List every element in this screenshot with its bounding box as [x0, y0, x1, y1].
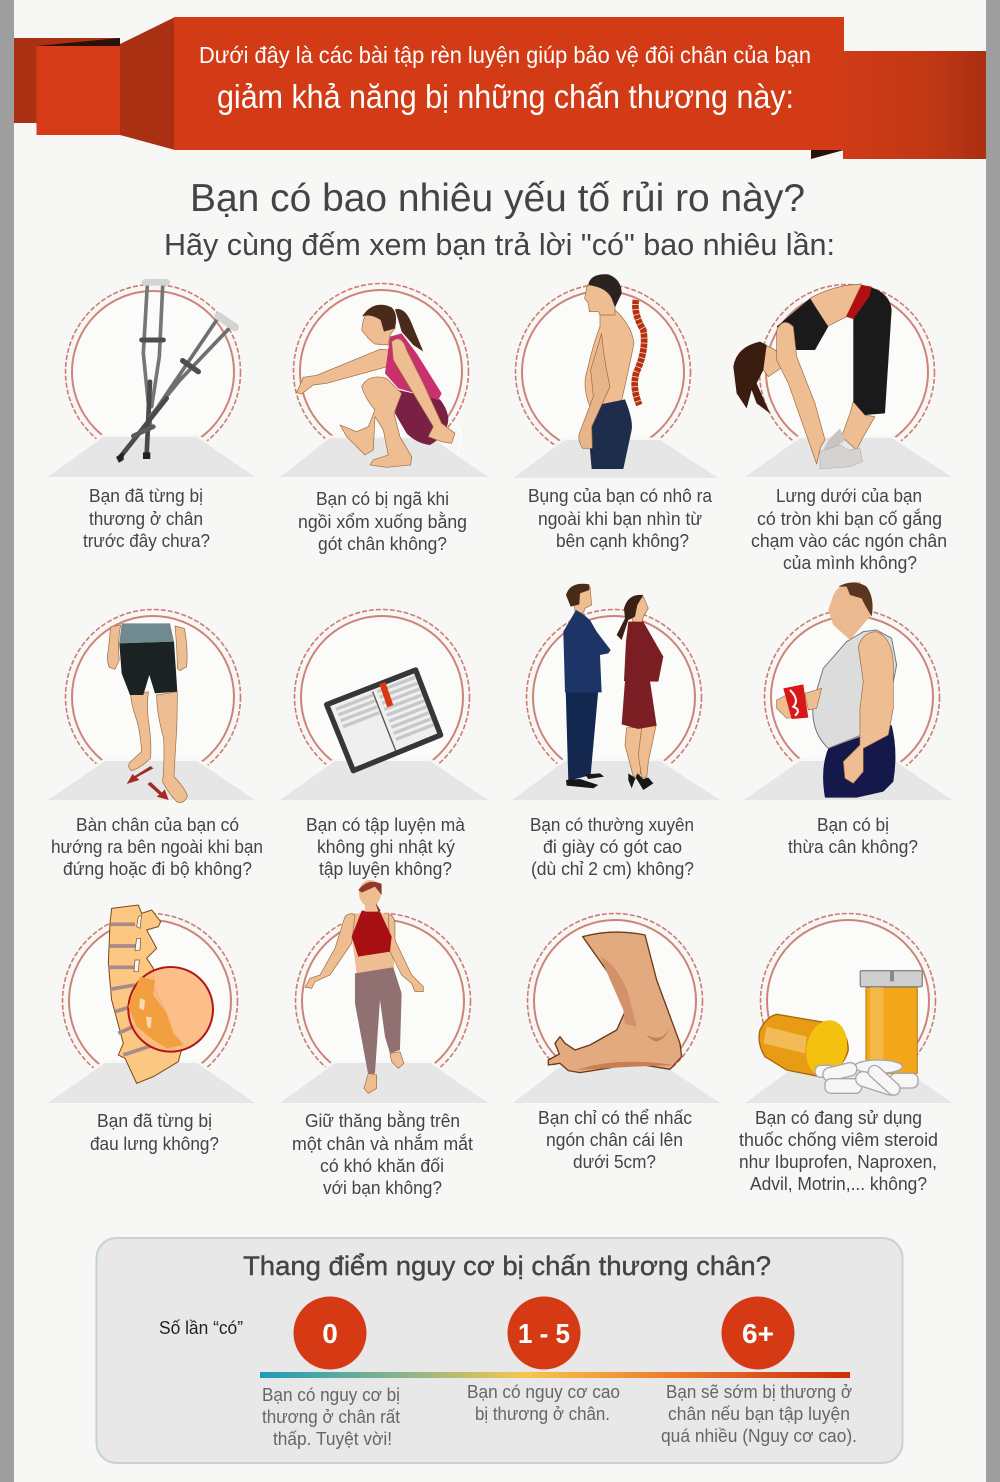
question text: Bạn đã từng bị: [97, 1110, 212, 1131]
icon: lumbar spine with highlight: [108, 905, 213, 1083]
low risk text: [262, 1384, 400, 1449]
question text: [530, 814, 694, 879]
score 0 badge: [294, 1296, 366, 1370]
medium risk text: [467, 1381, 620, 1424]
low risk text: thấp. Tuyệt vời!: [273, 1428, 392, 1449]
panel: high heels: [512, 584, 720, 879]
icon: squatting woman: [297, 305, 461, 467]
icon: woman bending to toes: [733, 284, 892, 469]
question text: [528, 485, 713, 551]
question text: Giữ thăng bằng trên: [305, 1110, 460, 1131]
icon: open journal: [327, 670, 441, 771]
question text: Bạn có thường xuyên: [530, 814, 694, 835]
question text: thuốc chống viêm steroid: [739, 1129, 938, 1150]
question text: ngón chân cái lên: [546, 1129, 683, 1150]
question text: Lưng dưới của bạn: [776, 485, 922, 506]
icon: man side profile with spine: [579, 274, 644, 469]
question text: [751, 485, 947, 573]
score 0 badge: 0: [322, 1318, 338, 1349]
question text: Bụng của bạn có nhô ra: [528, 485, 713, 506]
score 6+ badge: 6+: [742, 1318, 774, 1349]
banner text: [199, 42, 811, 115]
panel: belly posture: [513, 274, 718, 551]
question text: (dù chỉ 2 cm) không?: [531, 858, 694, 879]
high risk text: [661, 1381, 857, 1446]
question text: Advil, Motrin,... không?: [750, 1173, 927, 1194]
row label: Số lần “có”: [159, 1317, 243, 1338]
question text: Bạn có bị: [817, 814, 889, 835]
question text: đứng hoặc đi bộ không?: [63, 858, 252, 879]
question text: Bạn chỉ có thể nhấc: [538, 1107, 692, 1128]
question text: Bạn có bị ngã khi: [316, 488, 449, 509]
question text: với bạn không?: [323, 1177, 442, 1198]
question text: chạm vào các ngón chân: [751, 530, 947, 551]
panel: toe touch: [733, 284, 952, 573]
question text: ngoài khi bạn nhìn từ: [538, 508, 702, 529]
icon: foot lifting big toe: [548, 932, 682, 1073]
icon: crutches: [117, 282, 235, 461]
question text: Bạn có đang sử dụng: [755, 1107, 922, 1128]
question text: [306, 814, 466, 879]
medium risk text: Bạn có nguy cơ cao: [467, 1381, 620, 1402]
question text: [90, 1110, 219, 1154]
panel: balance: [280, 880, 488, 1198]
question text: đi giày có gót cao: [543, 836, 682, 857]
question text: ngồi xổm xuống bằng: [298, 511, 467, 532]
gradient scale bar: [260, 1372, 850, 1378]
icon: overweight man holding a can: [777, 582, 897, 798]
question text: bên cạnh không?: [556, 530, 689, 551]
question text: hướng ra bên ngoài khi bạn: [51, 836, 263, 857]
question text: một chân và nhắm mắt: [292, 1133, 473, 1154]
question text: [739, 1107, 938, 1194]
panel: medication: [739, 914, 952, 1194]
question text: [51, 814, 263, 879]
question text: [538, 1107, 692, 1172]
panel: feet turned out: [48, 610, 263, 879]
sub heading: Hãy cùng đếm xem bạn trả lời "có" bao nhiêu lần:: [164, 227, 835, 262]
banner ribbon: [14, 17, 986, 159]
question text: thương ở chân: [89, 508, 203, 529]
panel: back pain: [48, 905, 255, 1154]
question text: [298, 488, 467, 554]
panel: risk score: [96, 1238, 902, 1463]
score 6+ badge: [722, 1296, 794, 1370]
banner text: Dưới đây là các bài tập rèn luyện giúp bảo vệ đôi chân của bạn: [199, 42, 811, 68]
icon: legs with feet turned out: [107, 623, 187, 803]
panel: crutches: [48, 282, 255, 551]
high risk text: Bạn sẽ sớm bị thương ở: [666, 1381, 852, 1402]
icon: man and woman in office wear: [563, 584, 663, 790]
panel: overweight: [744, 582, 952, 857]
panel: squat fall: [280, 284, 488, 554]
question text: [83, 485, 210, 551]
panel: big toe lift: [513, 914, 720, 1172]
question text: đau lưng không?: [90, 1133, 219, 1154]
icon: woman balancing on one leg: [305, 880, 423, 1093]
question text: Bàn chân của bạn có: [76, 814, 239, 835]
question text: gót chân không?: [318, 533, 447, 554]
high risk text: chân nếu bạn tập luyện: [668, 1403, 850, 1424]
question text: [292, 1110, 473, 1198]
question text: [788, 814, 918, 857]
main heading: Bạn có bao nhiêu yếu tố rủi ro này?: [190, 177, 805, 220]
question text: trước đây chưa?: [83, 530, 210, 551]
banner text: giảm khả năng bị những chấn thương này:: [217, 78, 794, 115]
panel: training log: [280, 610, 488, 879]
score title: Thang điểm nguy cơ bị chấn thương chân?: [243, 1251, 771, 1281]
question text: không ghi nhật ký: [317, 836, 456, 857]
score 1-5 badge: 1 - 5: [518, 1318, 570, 1349]
medium risk text: bị thương ở chân.: [475, 1403, 610, 1424]
question text: có khó khăn đối: [320, 1155, 444, 1176]
question text: của mình không?: [783, 552, 917, 573]
question text: thừa cân không?: [788, 836, 918, 857]
question text: như Ibuprofen, Naproxen,: [739, 1151, 937, 1172]
low risk text: thương ở chân rất: [262, 1406, 400, 1427]
question text: có tròn khi bạn cố gắng: [757, 508, 942, 529]
icon: pill bottles and pills: [759, 971, 922, 1098]
question text: tập luyện không?: [319, 858, 452, 879]
low risk text: Bạn có nguy cơ bị: [262, 1384, 400, 1405]
question text: dưới 5cm?: [573, 1151, 656, 1172]
score 1-5 badge: [508, 1296, 580, 1370]
high risk text: quá nhiều (Nguy cơ cao).: [661, 1425, 857, 1446]
question text: Bạn có tập luyện mà: [306, 814, 466, 835]
question text: Bạn đã từng bị: [89, 485, 203, 506]
